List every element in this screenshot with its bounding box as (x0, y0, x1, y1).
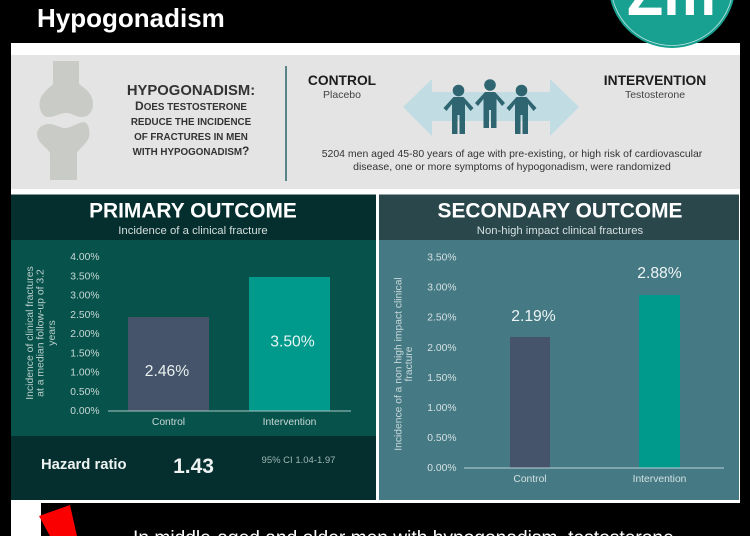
y axis ticks: 1.50% (427, 373, 456, 384)
y axis ticks: 0.00% (427, 463, 456, 474)
panel: primary outcome (11, 194, 376, 500)
panel: conclusion (39, 503, 750, 536)
y axis ticks: 2.00% (70, 329, 100, 340)
logo (608, 0, 736, 48)
heading: study question: WITH HYPOGONADISM? (133, 144, 249, 158)
bar chart: clinical fracture incidence (25, 252, 351, 428)
y axis title (394, 277, 415, 451)
text: study population (322, 149, 703, 173)
y axis title: Incidence of a non high impact clinical (394, 277, 404, 451)
heading: study question: REDUCE THE INCIDENCE (131, 117, 252, 128)
y axis ticks (70, 252, 100, 417)
heading: primary outcome: Incidence of a clinical fracture (118, 225, 268, 237)
hazard ratio: Hazard ratio (41, 457, 127, 473)
hazard ratio: 95% CI 1.04-1.97 (262, 455, 335, 466)
x axis labels (152, 417, 317, 428)
bar: control (128, 317, 209, 411)
bar: intervention: 3.50% (270, 334, 315, 350)
title: Hypogonadism (37, 3, 225, 33)
icon: double arrow (403, 79, 579, 136)
y axis ticks: 2.00% (427, 343, 456, 354)
label: control arm: CONTROL (308, 73, 376, 88)
y axis ticks: 0.50% (427, 433, 456, 444)
y axis ticks: 3.00% (70, 290, 100, 302)
x axis labels: Intervention (263, 417, 317, 428)
label: control arm: Placebo (323, 89, 361, 101)
y axis title (25, 266, 58, 400)
y axis title: at a median follow-up of 3.2 (36, 269, 46, 397)
label: intervention arm: INTERVENTION (604, 73, 706, 88)
y axis ticks: 3.00% (427, 282, 456, 294)
bar: control (510, 308, 556, 468)
y axis ticks: 3.50% (70, 271, 100, 282)
hazard ratio (41, 455, 335, 478)
heading: primary outcome: PRIMARY OUTCOME (89, 200, 297, 222)
divider (285, 66, 287, 181)
text: study population: 5204 men aged 45-80 years of age with pre-existing, or high risk of cardiovascular (322, 149, 703, 160)
y axis title: fracture (404, 346, 415, 381)
x axis labels: Intervention (633, 474, 687, 485)
icon: knee joint (37, 61, 93, 180)
y axis ticks: 1.00% (427, 403, 456, 414)
y axis ticks: 0.50% (70, 387, 100, 398)
bar: control: 2.46% (145, 363, 189, 380)
bar: control: 2.19% (511, 308, 556, 325)
heading: study question: OF FRACTURES IN MEN (134, 132, 248, 143)
x axis labels: Control (513, 474, 547, 485)
heading: study question: DOES TESTOSTERONE (135, 99, 247, 113)
text: study population: disease, one or more symptoms of hypogonadism, were randomized (353, 162, 671, 173)
y axis title: years (47, 320, 58, 346)
y axis ticks: 0.00% (70, 406, 100, 417)
heading: study question (127, 83, 255, 158)
bar chart: non-high impact fracture incidence (394, 252, 724, 485)
label: intervention arm: Testosterone (625, 89, 685, 101)
icon: red marker (39, 505, 77, 536)
heading: secondary outcome: Non-high impact clinical fractures (477, 225, 644, 237)
label: control arm (308, 73, 376, 101)
panel: study design (11, 55, 740, 189)
y axis ticks: 2.50% (70, 310, 100, 321)
bar: intervention (249, 277, 330, 411)
x axis labels: Control (152, 417, 185, 428)
y axis ticks: 4.00% (70, 252, 100, 263)
x axis labels (513, 474, 687, 485)
y axis ticks (427, 252, 456, 474)
y axis ticks: 1.50% (70, 348, 100, 359)
panel: secondary outcome (379, 194, 739, 500)
y axis title: Incidence of clinical fractures (25, 266, 36, 400)
heading: secondary outcome: SECONDARY OUTCOME (438, 200, 683, 222)
heading: secondary outcome (438, 200, 683, 237)
y axis ticks: 1.00% (70, 368, 100, 378)
y axis ticks: 2.50% (427, 312, 456, 324)
bar: intervention (637, 265, 682, 468)
heading: study question: HYPOGONADISM: (127, 83, 255, 99)
label: intervention arm (604, 73, 706, 101)
icon: three people (444, 79, 536, 134)
hazard ratio: 1.43 (173, 455, 214, 478)
heading: primary outcome (89, 200, 297, 237)
y axis ticks: 3.50% (427, 252, 456, 264)
bar: intervention: 2.88% (637, 265, 682, 282)
